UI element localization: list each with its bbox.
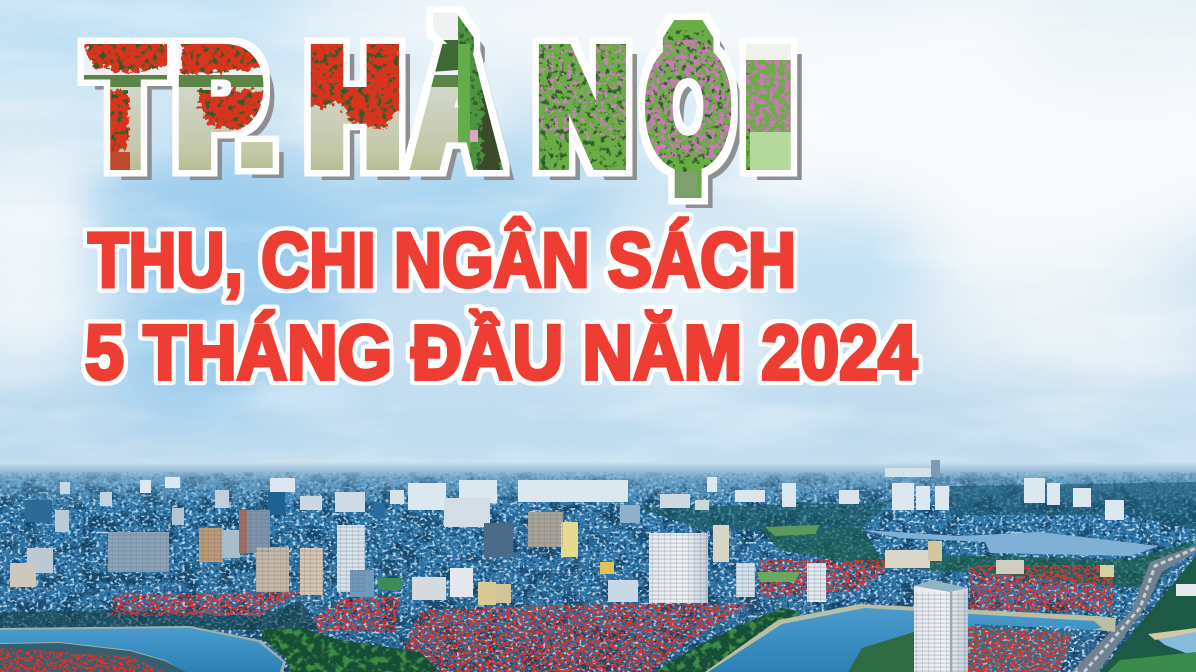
letter N: N: [538, 20, 627, 195]
heading line 2: 5 THÁNG ĐẦU NĂM 2024: [85, 309, 917, 396]
south shore houses: [968, 626, 1078, 672]
main lake: [705, 604, 1116, 672]
tree belts: [0, 482, 1196, 630]
floor lines: [108, 510, 826, 603]
tower blocks: [10, 460, 1196, 605]
background: sky with clouds: [0, 0, 1196, 480]
mid towers: [10, 492, 1196, 605]
peninsula bottom of main lake: [848, 632, 914, 672]
letter À: À: [416, 20, 497, 195]
tree strip by main lake: [655, 608, 800, 672]
shadowed clusters: [0, 472, 1196, 672]
title: TP. HÀ NỘI: [90, 19, 792, 195]
field patches: [765, 525, 820, 536]
small pond bottom right: [1151, 630, 1196, 657]
island: [0, 643, 186, 672]
letter H: H: [310, 20, 400, 195]
sand bank: [1148, 628, 1196, 640]
letter I: I: [744, 20, 792, 195]
road corridor greenery: [1100, 556, 1196, 672]
red roofs: [110, 560, 1113, 672]
bright green field: [1108, 652, 1196, 672]
tree strip foliage: [655, 608, 800, 672]
letter T: T: [90, 20, 162, 195]
highway lanes: [1084, 548, 1196, 672]
far skyline: [60, 460, 1124, 523]
back lake: [862, 530, 1159, 556]
letter P: P: [178, 20, 261, 195]
foreground white tower: [914, 580, 968, 672]
city base: [0, 462, 1196, 672]
tree park: [262, 628, 440, 672]
heading line 1: THU, CHI NGÂN SÁCH: [88, 216, 796, 304]
park foliage: [262, 628, 440, 672]
dense low-rise houses: [0, 472, 1196, 672]
left lake: [0, 626, 286, 672]
cityscape photograph: [0, 460, 1196, 672]
full stop: .: [236, 56, 278, 190]
cloud wisps: [0, 0, 1196, 470]
letter Ộ: Ộ: [647, 19, 730, 195]
highway: [1071, 545, 1196, 672]
darker urban texture: [0, 472, 1196, 672]
heading: two red lines: [85, 216, 917, 396]
